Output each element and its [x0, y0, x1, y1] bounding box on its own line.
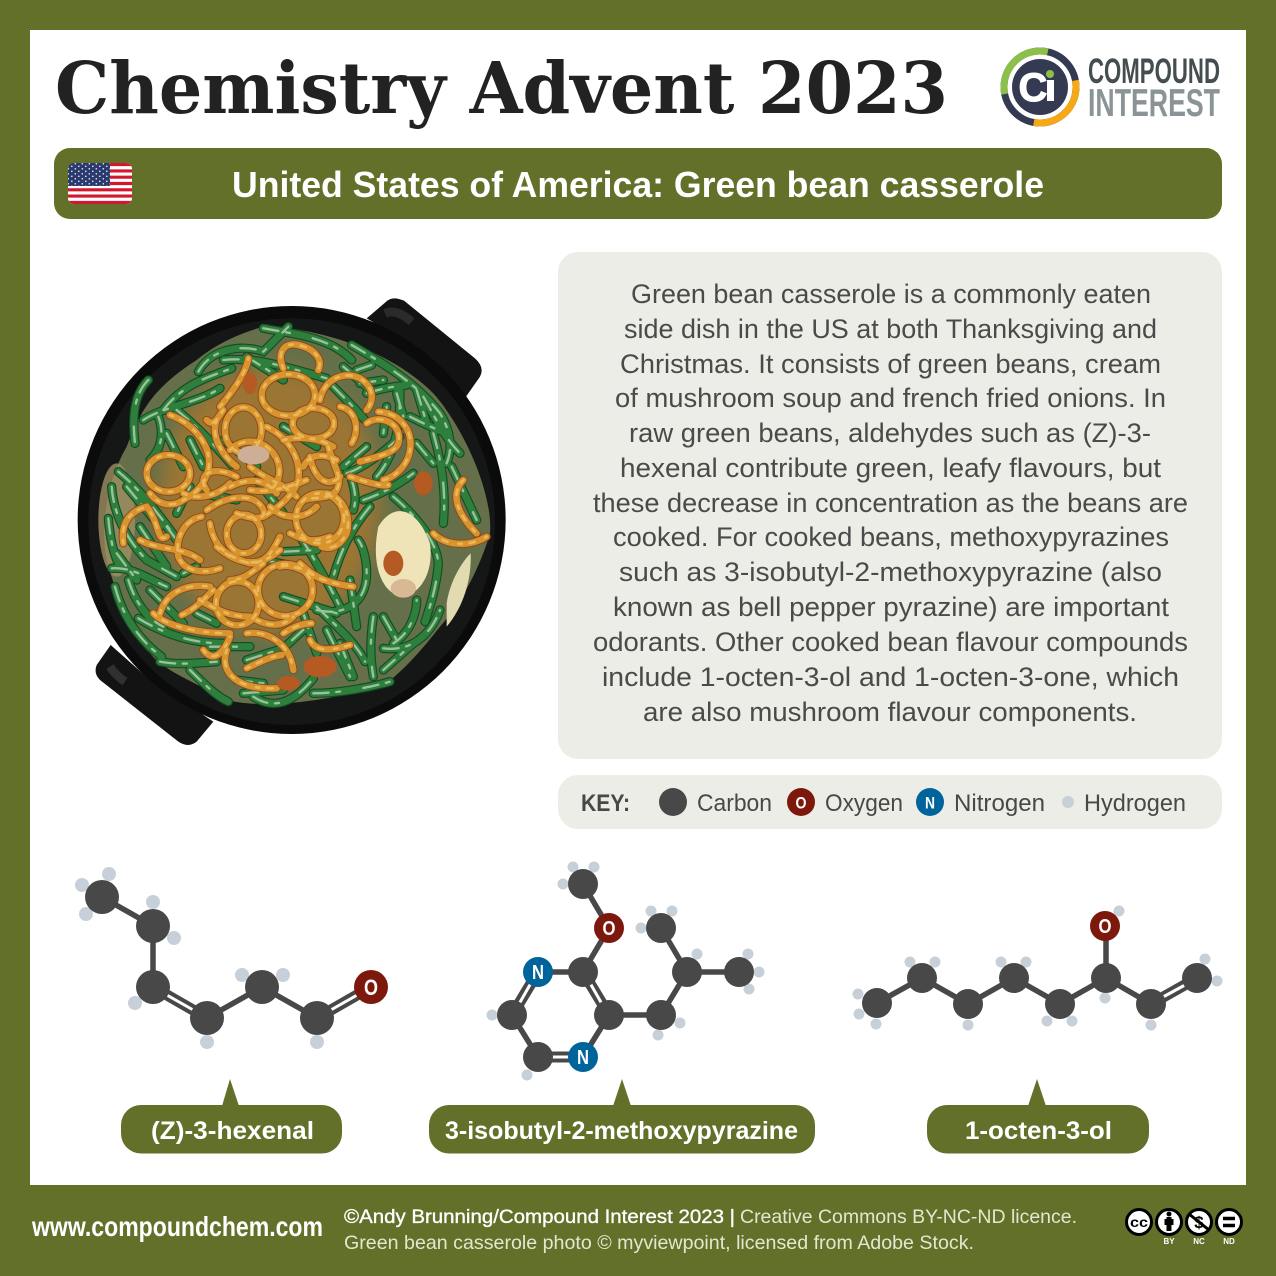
label: 3-isobutyl-2-methoxypyrazine [429, 1079, 815, 1154]
description text: are also mushroom flavour components. [643, 697, 1137, 727]
casserole sauce base [104, 327, 490, 704]
icons: Creative Commons BY-NC-ND: cc [1130, 1214, 1148, 1230]
label: (Z)-3-hexenal: (Z)-3-hexenal [151, 1117, 314, 1145]
footer credits: Creative Commons BY-NC-ND licence. [740, 1206, 1077, 1228]
footer website: www.compoundchem.com [31, 1211, 323, 1242]
heading banner: United States of America: Green bean casserole [232, 164, 1044, 205]
molecule: 3-isobutyl-2-methoxypyrazine: N [532, 962, 544, 984]
logo: Compound Interest: C [1019, 66, 1047, 110]
description text: hexenal contribute green, leafy flavours, but [620, 453, 1162, 483]
description text: these decrease in concentration as the beans are [593, 488, 1188, 518]
panel: key: Carbon [697, 790, 772, 817]
molecule: 3-isobutyl-2-methoxypyrazine [486, 862, 764, 1080]
description text: cooked. For cooked beans, methoxypyrazines [613, 522, 1169, 552]
footer credits: Green bean casserole photo © myviewpoint, licensed from Adobe Stock. [344, 1232, 974, 1254]
dish handles [96, 298, 482, 745]
panel: key: Nitrogen [954, 790, 1045, 817]
icon: US flag [68, 163, 132, 204]
icons: Creative Commons BY-NC-ND: ND [1223, 1237, 1235, 1246]
photo: green bean casserole in black dish [78, 298, 506, 745]
icons: Creative Commons BY-NC-ND [1126, 1210, 1242, 1246]
panel: key: O [796, 794, 806, 812]
description text: include 1-octen-3-ol and 1-octen-3-one, which [602, 662, 1179, 692]
browned onion bits [237, 373, 433, 691]
warm centre under onions [160, 367, 380, 633]
molecule: 3-isobutyl-2-methoxypyrazine: O [602, 918, 616, 940]
description text: such as 3-isobutyl-2-methoxypyrazine (also [619, 557, 1162, 587]
panel: key: Oxygen [825, 790, 903, 817]
description text: known as bell pepper pyrazine) are important [613, 592, 1170, 622]
description text: odorants. Other cooked bean flavour compounds [593, 627, 1188, 657]
tan sauce at left edge [98, 463, 135, 577]
icons: Creative Commons BY-NC-ND: $ [1194, 1213, 1204, 1232]
green beans [108, 327, 477, 703]
molecule: 3-isobutyl-2-methoxypyrazine: N [577, 1047, 589, 1069]
label: (Z)-3-hexenal [121, 1079, 342, 1154]
fried onion rings [123, 344, 487, 688]
description text: of mushroom soup and french fried onions. In [615, 383, 1166, 413]
description text: Christmas. It consists of green beans, cream [620, 349, 1161, 379]
label: 3-isobutyl-2-methoxypyrazine: 3-isobutyl-2-methoxypyrazine [445, 1117, 798, 1145]
molecule: 1-octen-3-ol [852, 906, 1222, 1030]
icons: Creative Commons BY-NC-ND: NC [1193, 1237, 1205, 1246]
description text [593, 279, 1188, 727]
panel: key: Hydrogen [1084, 790, 1186, 817]
logo: Compound Interest [998, 45, 1220, 129]
molecule: 1-octen-3-ol: O [1098, 916, 1112, 938]
logo: Compound Interest: INTEREST [1088, 82, 1220, 125]
dish inner wall [88, 318, 495, 725]
panel: key [558, 775, 1222, 829]
label: 1-octen-3-ol [927, 1079, 1149, 1154]
description text: side dish in the US at both Thanksgiving and [624, 314, 1157, 344]
molecule: (Z)-3-hexenal [75, 867, 388, 1049]
footer credits [344, 1206, 1077, 1254]
description text: raw green beans, aldehydes such as (Z)-3- [629, 418, 1151, 448]
molecule: (Z)-3-hexenal: O [364, 975, 378, 1000]
title: Chemistry Advent 2023 [55, 46, 948, 130]
panel: key: KEY: [581, 790, 630, 817]
dish body [78, 306, 506, 734]
sauce glare [447, 553, 471, 627]
description text: Green bean casserole is a commonly eaten [631, 279, 1151, 309]
panel: description [558, 252, 1222, 759]
cheesy sauce patch [376, 511, 431, 597]
footer credits: ©Andy Brunning/Compound Interest 2023 | [344, 1206, 735, 1228]
panel: key: N [925, 794, 935, 812]
label: 1-octen-3-ol: 1-octen-3-ol [965, 1117, 1112, 1145]
heading banner [54, 148, 1222, 219]
icons: Creative Commons BY-NC-ND: BY [1163, 1237, 1175, 1246]
